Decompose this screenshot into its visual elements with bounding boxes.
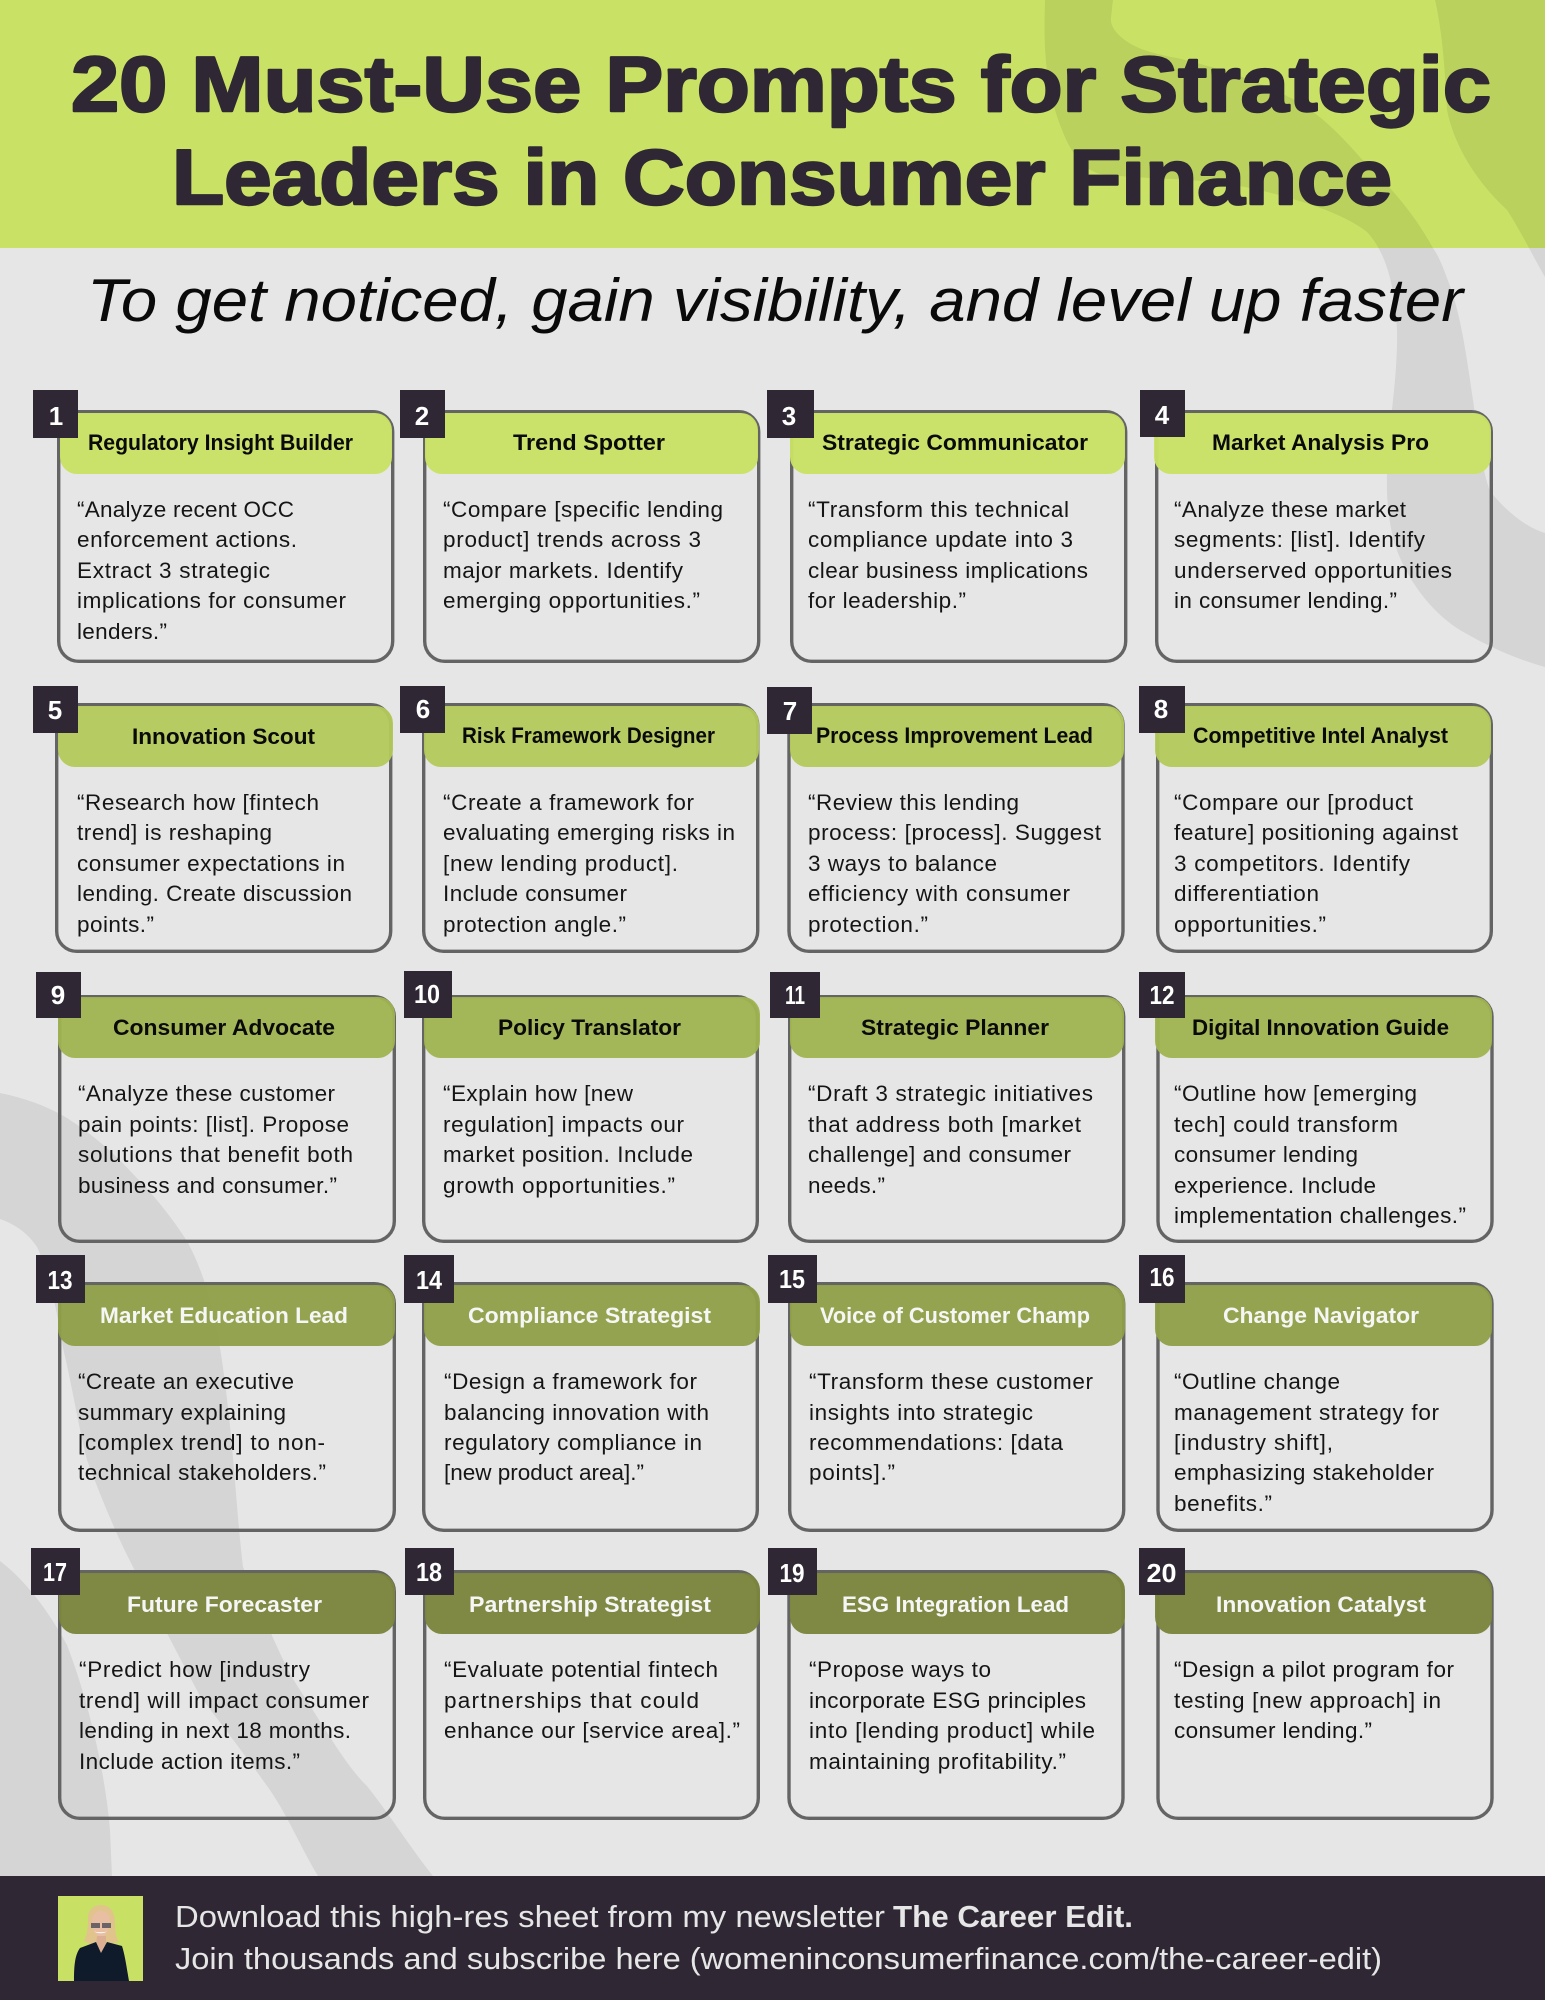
card 7: Process Improvement Lead: “Review this lending: [808, 790, 1019, 815]
card 10: Policy Translator: market position. Include: [443, 1142, 693, 1167]
card 1: Regulatory Insight Builder: [33, 390, 393, 661]
card 12: Digital Innovation Guide: implementation challenges.”: [1174, 1203, 1466, 1228]
card 13: Market Education Lead: technical stakeholders.”: [78, 1460, 326, 1485]
card 11: Strategic Planner: 11: [785, 980, 805, 1010]
card 3: Strategic Communicator: clear business implications: [808, 558, 1088, 583]
footer text: Join thousands and subscribe here (womeninconsumerfinance.com/the-career-edit): [175, 1941, 1382, 1976]
card 14: Compliance Strategist: 14: [416, 1265, 442, 1295]
card 16: Change Navigator: management strategy for: [1174, 1400, 1440, 1425]
card 17: Future Forecaster: trend] will impact consumer: [79, 1688, 370, 1713]
card 17: Future Forecaster: Future Forecaster: [127, 1592, 322, 1617]
card 12: Digital Innovation Guide: 12: [1150, 980, 1174, 1010]
card 9: Consumer Advocate: Consumer Advocate: [113, 1015, 335, 1040]
card 16: Change Navigator: benefits.”: [1174, 1491, 1272, 1516]
card 7: Process Improvement Lead: [767, 687, 1124, 951]
card 19: ESG Integration Lead: into [lending product] while: [809, 1718, 1095, 1743]
card 13: Market Education Lead: Market Education Lead: [100, 1303, 348, 1328]
card 20: Innovation Catalyst: consumer lending.”: [1174, 1718, 1372, 1743]
card 20: Innovation Catalyst: [1139, 1548, 1492, 1818]
card 14: Compliance Strategist: [new product area].”: [444, 1460, 644, 1485]
card 19: ESG Integration Lead: 19: [780, 1558, 804, 1588]
card 5: Innovation Scout: points.”: [77, 912, 154, 937]
card 13: Market Education Lead: [complex trend] to non-: [78, 1430, 325, 1455]
card 2: Trend Spotter: [400, 390, 759, 661]
card 16: Change Navigator: Change Navigator: [1223, 1303, 1419, 1328]
card 18: Partnership Strategist: “Evaluate potential fintech: [444, 1657, 718, 1682]
card 6: Risk Framework Designer: protection angle.”: [443, 912, 626, 937]
card 3: Strategic Communicator: [767, 390, 1126, 661]
card 3: Strategic Communicator: “Transform this technical: [808, 497, 1069, 522]
card 14: Compliance Strategist: “Design a framework for: [444, 1369, 698, 1394]
card 1: Regulatory Insight Builder: enforcement actions.: [77, 527, 297, 552]
card 11: Strategic Planner: “Draft 3 strategic initiatives: [808, 1081, 1093, 1106]
card 2: Trend Spotter: major markets. Identify: [443, 558, 684, 583]
card 12: Digital Innovation Guide: consumer lending: [1174, 1142, 1358, 1167]
card 11: Strategic Planner: needs.”: [808, 1173, 885, 1198]
card 8: Competitive Intel Analyst: “Compare our [product: [1174, 790, 1414, 815]
card 15: Voice of Customer Champ: Voice of Customer Champ: [820, 1303, 1090, 1328]
card 17: Future Forecaster: “Predict how [industry: [79, 1657, 311, 1682]
card 16: Change Navigator: [1139, 1255, 1492, 1530]
title: 20 Must-Use Prompts for Strategic: [71, 40, 1491, 128]
card 20: Innovation Catalyst: “Design a pilot program for: [1174, 1657, 1454, 1682]
card 7: Process Improvement Lead: process: [process]. Suggest: [808, 820, 1102, 845]
card 1: Regulatory Insight Builder: lenders.”: [77, 619, 167, 644]
card 8: Competitive Intel Analyst: 3 competitors. Identify: [1174, 851, 1411, 876]
card 19: ESG Integration Lead: maintaining profitability.”: [809, 1749, 1066, 1774]
card 5: Innovation Scout: 5: [48, 695, 62, 725]
title: [71, 40, 1491, 221]
card 6: Risk Framework Designer: evaluating emerging risks in: [443, 820, 735, 845]
card 4: Market Analysis Pro: segments: [list]. Identify: [1174, 527, 1426, 552]
card 2: Trend Spotter: Trend Spotter: [513, 430, 665, 455]
card 2: Trend Spotter: emerging opportunities.”: [443, 588, 700, 613]
card 10: Policy Translator: growth opportunities.”: [443, 1173, 675, 1198]
card 14: Compliance Strategist: balancing innovation with: [444, 1400, 709, 1425]
card 4: Market Analysis Pro: Market Analysis Pro: [1212, 430, 1429, 455]
card 6: Risk Framework Designer: “Create a framework for: [443, 790, 694, 815]
card 5: Innovation Scout: consumer expectations in: [77, 851, 345, 876]
card 5: Innovation Scout: lending. Create discussion: [77, 881, 352, 906]
card 6: Risk Framework Designer: Include consumer: [443, 881, 628, 906]
card 16: Change Navigator: [industry shift],: [1174, 1430, 1333, 1455]
card 10: Policy Translator: [404, 971, 760, 1241]
card 1: Regulatory Insight Builder: 1: [49, 401, 63, 431]
card 10: Policy Translator: 10: [414, 979, 440, 1009]
card 2: Trend Spotter: 2: [415, 401, 429, 431]
card 7: Process Improvement Lead: Process Improvement Lead: [816, 723, 1093, 748]
card 18: Partnership Strategist: [405, 1548, 760, 1818]
card 16: Change Navigator: 16: [1150, 1262, 1174, 1292]
card 4: Market Analysis Pro: [1140, 390, 1491, 661]
card 9: Consumer Advocate: pain points: [list]. Propose: [78, 1112, 349, 1137]
card 1: Regulatory Insight Builder: Regulatory Insight Builder: [88, 430, 353, 455]
card 13: Market Education Lead: [36, 1255, 395, 1530]
card 5: Innovation Scout: trend] is reshaping: [77, 820, 272, 845]
header band: [0, 0, 1545, 248]
card 12: Digital Innovation Guide: experience. Include: [1174, 1173, 1376, 1198]
card 11: Strategic Planner: [770, 972, 1124, 1241]
card 13: Market Education Lead: 13: [48, 1265, 72, 1295]
card 14: Compliance Strategist: regulatory compliance in: [444, 1430, 702, 1455]
card 8: Competitive Intel Analyst: [1139, 686, 1491, 951]
title: Leaders in Consumer Finance: [172, 133, 1392, 221]
card 17: Future Forecaster: Include action items.”: [79, 1749, 300, 1774]
card 4: Market Analysis Pro: 4: [1155, 400, 1170, 430]
card 11: Strategic Planner: challenge] and consumer: [808, 1142, 1072, 1167]
card 17: Future Forecaster: [31, 1548, 395, 1818]
author photo: [58, 1896, 143, 1981]
footer text: The Career Edit.: [893, 1899, 1133, 1934]
card 20: Innovation Catalyst: testing [new approach] in: [1174, 1688, 1441, 1713]
card 17: Future Forecaster: lending in next 18 months.: [79, 1718, 351, 1743]
card 7: Process Improvement Lead: efficiency with consumer: [808, 881, 1070, 906]
card 2: Trend Spotter: “Compare [specific lending: [443, 497, 723, 522]
card 4: Market Analysis Pro: in consumer lending.”: [1174, 588, 1397, 613]
card 2: Trend Spotter: product] trends across 3: [443, 527, 701, 552]
subtitle: To get noticed, gain visibility, and level up faster: [87, 267, 1465, 334]
card 15: Voice of Customer Champ: 15: [779, 1264, 805, 1294]
card 14: Compliance Strategist: Compliance Strategist: [468, 1303, 712, 1328]
card 10: Policy Translator: Policy Translator: [498, 1015, 681, 1040]
card 15: Voice of Customer Champ: [768, 1255, 1125, 1530]
card 13: Market Education Lead: summary explaining: [78, 1400, 286, 1425]
card 5: Innovation Scout: Innovation Scout: [132, 724, 316, 749]
card 7: Process Improvement Lead: 7: [783, 696, 797, 726]
footer text: [175, 1899, 1382, 1976]
card 6: Risk Framework Designer: [new lending product].: [443, 851, 678, 876]
card 7: Process Improvement Lead: 3 ways to balance: [808, 851, 997, 876]
card 11: Strategic Planner: that address both [market: [808, 1112, 1082, 1137]
card 8: Competitive Intel Analyst: 8: [1154, 694, 1168, 724]
card 1: Regulatory Insight Builder: Extract 3 strategic: [77, 558, 270, 583]
card 12: Digital Innovation Guide: “Outline how [emerging: [1174, 1081, 1417, 1106]
card 9: Consumer Advocate: [36, 972, 395, 1241]
card 13: Market Education Lead: “Create an executive: [78, 1369, 294, 1394]
card 9: Consumer Advocate: solutions that benefit both: [78, 1142, 353, 1167]
card 10: Policy Translator: “Explain how [new: [443, 1081, 634, 1106]
card 3: Strategic Communicator: 3: [782, 401, 796, 431]
card 8: Competitive Intel Analyst: differentiation: [1174, 881, 1319, 906]
card 4: Market Analysis Pro: underserved opportunities: [1174, 558, 1452, 583]
card 15: Voice of Customer Champ: points].”: [809, 1460, 895, 1485]
card 17: Future Forecaster: 17: [43, 1557, 67, 1587]
card 5: Innovation Scout: [33, 686, 393, 951]
footer text: Download this high-res sheet from my newsletter: [175, 1899, 885, 1934]
card 12: Digital Innovation Guide: Digital Innovation Guide: [1192, 1015, 1449, 1040]
card 18: Partnership Strategist: 18: [416, 1557, 442, 1587]
card 3: Strategic Communicator: compliance update into 3: [808, 527, 1073, 552]
card 5: Innovation Scout: “Research how [fintech: [77, 790, 319, 815]
footer band: [0, 1876, 1545, 2000]
card 20: Innovation Catalyst: 20: [1146, 1558, 1176, 1588]
card 8: Competitive Intel Analyst: opportunities.”: [1174, 912, 1326, 937]
card 4: Market Analysis Pro: “Analyze these market: [1174, 497, 1407, 522]
card 20: Innovation Catalyst: Innovation Catalyst: [1216, 1592, 1427, 1617]
card 6: Risk Framework Designer: [400, 686, 759, 951]
card 1: Regulatory Insight Builder: “Analyze recent OCC: [77, 497, 294, 522]
card 16: Change Navigator: “Outline change: [1174, 1369, 1340, 1394]
card 15: Voice of Customer Champ: recommendations: [data: [809, 1430, 1063, 1455]
card 18: Partnership Strategist: partnerships that could: [444, 1688, 699, 1713]
card 10: Policy Translator: regulation] impacts our: [443, 1112, 684, 1137]
card 19: ESG Integration Lead: ESG Integration Lead: [842, 1592, 1069, 1617]
card 14: Compliance Strategist: [404, 1255, 760, 1530]
card 9: Consumer Advocate: business and consumer.”: [78, 1173, 337, 1198]
card 6: Risk Framework Designer: Risk Framework Designer: [462, 723, 715, 748]
card 11: Strategic Planner: Strategic Planner: [861, 1015, 1049, 1040]
card 8: Competitive Intel Analyst: Competitive Intel Analyst: [1193, 723, 1449, 748]
card 15: Voice of Customer Champ: insights into strategic: [809, 1400, 1033, 1425]
card 12: Digital Innovation Guide: [1139, 972, 1492, 1241]
card 7: Process Improvement Lead: protection.”: [808, 912, 928, 937]
card 9: Consumer Advocate: “Analyze these customer: [78, 1081, 336, 1106]
card 15: Voice of Customer Champ: “Transform these customer: [809, 1369, 1094, 1394]
card 18: Partnership Strategist: enhance our [service area].”: [444, 1718, 740, 1743]
card 6: Risk Framework Designer: 6: [416, 694, 430, 724]
card 19: ESG Integration Lead: “Propose ways to: [809, 1657, 991, 1682]
card 1: Regulatory Insight Builder: implications for consumer: [77, 588, 346, 613]
card 9: Consumer Advocate: 9: [51, 980, 65, 1010]
card 18: Partnership Strategist: Partnership Strategist: [469, 1592, 712, 1617]
card 12: Digital Innovation Guide: tech] could transform: [1174, 1112, 1398, 1137]
card 16: Change Navigator: emphasizing stakeholder: [1174, 1460, 1434, 1485]
card 8: Competitive Intel Analyst: feature] positioning against: [1174, 820, 1459, 845]
card 3: Strategic Communicator: for leadership.”: [808, 588, 966, 613]
card 19: ESG Integration Lead: [768, 1548, 1125, 1818]
card 19: ESG Integration Lead: incorporate ESG principles: [809, 1688, 1086, 1713]
card 3: Strategic Communicator: Strategic Communicator: [822, 430, 1088, 455]
